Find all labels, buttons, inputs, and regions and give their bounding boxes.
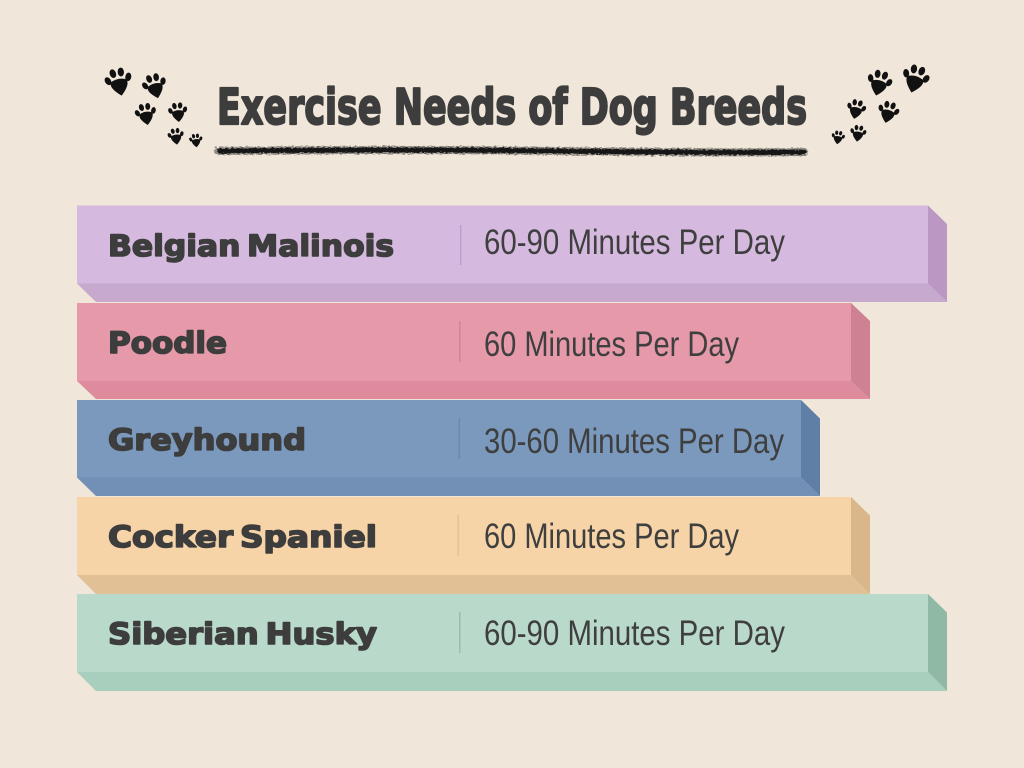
breed label: Cocker Spaniel bbox=[108, 520, 377, 554]
panel: Greyhound bbox=[77, 400, 820, 496]
breed label: Belgian Malinois bbox=[108, 229, 394, 263]
breed label: Siberian Husky bbox=[108, 617, 377, 651]
duration: 30-60 Minutes Per Day bbox=[484, 422, 784, 461]
panel: Cocker Spaniel bbox=[77, 497, 870, 594]
icon: right paw prints bbox=[830, 61, 933, 145]
duration: 60-90 Minutes Per Day bbox=[484, 614, 785, 653]
panel: Belgian Malinois bbox=[77, 206, 947, 302]
panel: Siberian Husky bbox=[77, 594, 947, 691]
panel: Poodle bbox=[77, 303, 870, 399]
icon: left paw prints bbox=[101, 65, 204, 148]
breed label: Poodle bbox=[108, 326, 227, 360]
duration: 60 Minutes Per Day bbox=[484, 517, 739, 556]
duration: 60 Minutes Per Day bbox=[484, 325, 739, 364]
brush underline bbox=[218, 150, 804, 152]
breed label: Greyhound bbox=[108, 423, 306, 457]
duration: 60-90 Minutes Per Day bbox=[484, 223, 785, 262]
title: Exercise Needs of Dog Breeds bbox=[217, 79, 807, 136]
